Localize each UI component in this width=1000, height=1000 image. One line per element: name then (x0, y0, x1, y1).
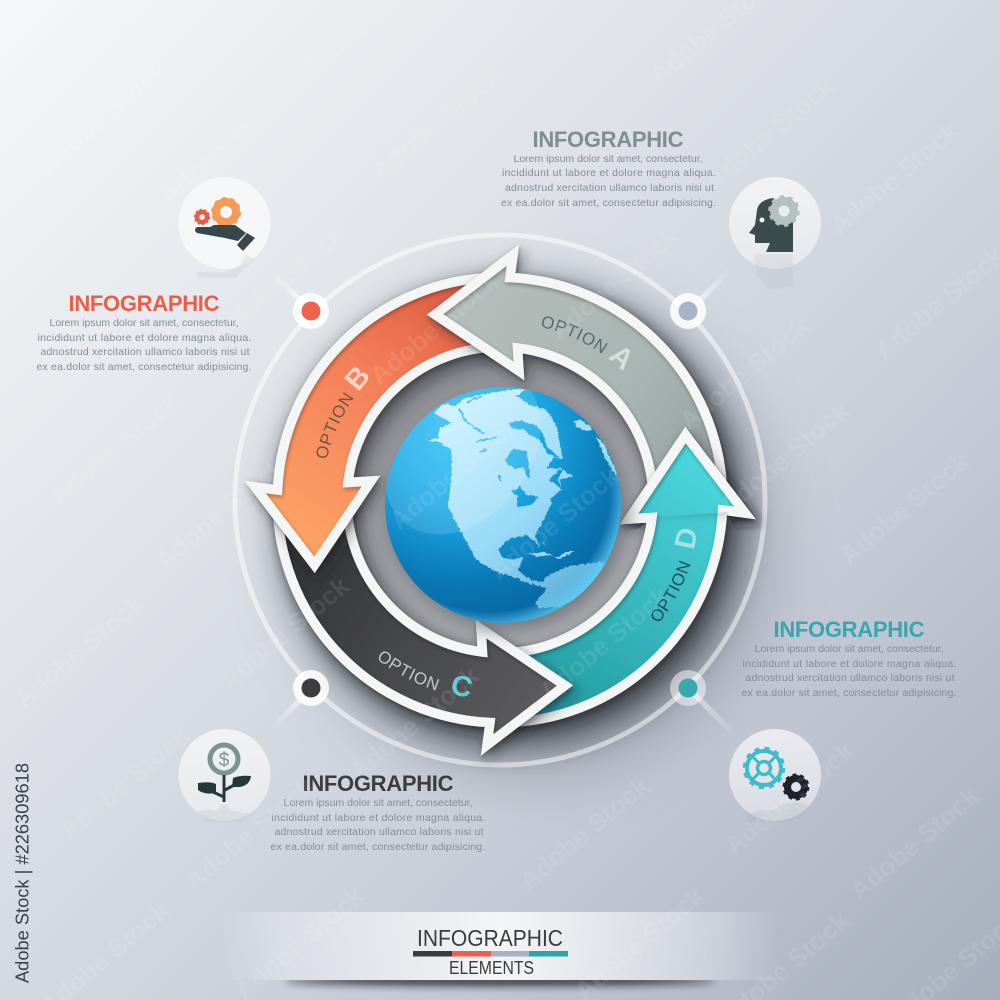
watermark: Adobe Stock (366, 60, 507, 186)
globe highlight (386, 387, 540, 534)
text block A: INFOGRAPHIC (532, 127, 684, 152)
watermark: Adobe Stock (699, 70, 840, 196)
text block D: ex ea.dolor sit amet, consectetur adipisicing. (742, 687, 956, 699)
connector spoke: C (272, 689, 311, 728)
banner shadow (285, 976, 715, 986)
text block C: ex ea.dolor sit amet, consectetur adipisicing. (270, 841, 486, 853)
icon circle: head with gear (729, 177, 821, 290)
watermark: Adobe Stock (534, 580, 675, 706)
diagram shadow (280, 283, 775, 780)
icon reflection (198, 804, 250, 822)
arrow C: OPTION (378, 652, 440, 690)
icon circle: money plant (178, 729, 270, 822)
connector spoke: A (689, 269, 731, 311)
outer thin ring (235, 235, 765, 765)
icon: hand with gears (195, 198, 255, 251)
arrow B: OPTION (316, 392, 354, 458)
watermark: Adobe Stock (149, 450, 290, 576)
node: option B (293, 293, 329, 329)
arrow D head overlapping arrow A tail (620, 427, 764, 532)
icon reflection (745, 802, 808, 822)
text block B: INFOGRAPHIC (68, 291, 220, 316)
text block A: ex ea.dolor sit amet, consectetur adipisicing. (501, 197, 716, 209)
banner title: INFOGRAPHIC (417, 925, 563, 951)
side stock label: Adobe Stock | #226309618 (12, 763, 32, 983)
icon circle: hand with gears (178, 177, 270, 278)
watermark: Adobe Stock (32, 55, 173, 181)
watermark: Adobe Stock (719, 735, 860, 861)
text block B (36, 291, 252, 373)
node: option C (293, 670, 329, 706)
icon reflection (197, 254, 255, 278)
text block C (270, 771, 486, 853)
connector spoke: B (272, 272, 311, 311)
arrow D (512, 477, 764, 739)
icon: gears (744, 748, 808, 799)
banner colour bar (413, 951, 568, 956)
text block B: adnostrud xercitation ullamco laboris nisi ut (40, 346, 250, 358)
globe rim light (435, 438, 621, 623)
text block A (501, 127, 716, 209)
watermark: Adobe Stock (214, 570, 355, 696)
watermark: Adobe Stock (9, 588, 150, 714)
arrow A: OPTION (542, 316, 608, 354)
text block C: INFOGRAPHIC (302, 771, 454, 796)
arrow D: D (669, 525, 705, 552)
text block D (742, 617, 956, 699)
arrow A: A (603, 339, 640, 377)
arrow B (244, 270, 496, 574)
watermark: Adobe Stock (834, 445, 975, 571)
icon: head with gear (749, 196, 798, 252)
watermark: Adobe Stock (714, 395, 855, 521)
watermark: Adobe Stock (364, 265, 505, 391)
icon reflection (755, 254, 793, 290)
watermark: Adobe Stock (824, 115, 965, 241)
inner disc (348, 348, 652, 652)
icon: money plant: $ (219, 750, 230, 771)
arrow D: OPTION (652, 560, 690, 622)
watermark: Adobe Stock (179, 770, 320, 896)
banner subtitle: ELEMENTS (449, 958, 534, 978)
globe (385, 387, 621, 623)
watermark: Adobe Stock (344, 660, 485, 786)
text block B: incididunt ut labore et dolore magna aliqua. (38, 332, 252, 344)
watermark: Adobe Stock (54, 720, 195, 846)
text block C: adnostrud xercitation ullamco laboris nisi ut (274, 826, 484, 838)
text block B: ex ea.dolor sit amet, consectetur adipisicing. (36, 361, 252, 373)
arrow A (426, 244, 738, 520)
bottom banner (220, 912, 780, 980)
watermark: Adobe Stock (544, 220, 685, 346)
text block A: adnostrud xercitation ullamco laboris nisi ut (505, 182, 714, 194)
text block B: Lorem ipsum dolor sit amet, consectetur, (50, 317, 238, 329)
text block C: incididunt ut labore et dolore magna aliqua. (272, 812, 486, 824)
watermark: Adobe Stock (209, 220, 350, 346)
watermark: Adobe Stock (514, 770, 655, 896)
continents (427, 389, 618, 608)
watermark: Adobe Stock (844, 780, 985, 906)
text block A: Lorem ipsum dolor sit amet, consectetur, (514, 153, 702, 165)
text block C: Lorem ipsum dolor sit amet, consectetur, (284, 797, 472, 809)
text block D: incididunt ut labore et dolore magna aliqua. (742, 658, 956, 670)
watermark: Adobe Stock (484, 460, 625, 586)
text block D: adnostrud xercitation ullamco laboris nisi ut (746, 672, 955, 684)
arrow C: C (448, 669, 475, 705)
text block A: incididunt ut labore et dolore magna aliqua. (502, 167, 716, 179)
watermark: Adobe Stock (384, 410, 525, 536)
arrow C (269, 510, 581, 765)
icon circle: gears (729, 729, 821, 822)
text block D: Lorem ipsum dolor sit amet, consectetur, (754, 643, 944, 655)
arrow B: B (339, 360, 377, 397)
globe shadow (388, 391, 628, 631)
watermark: Adobe Stock (154, 85, 295, 211)
connector spoke: D (689, 689, 733, 733)
node: option A (670, 293, 706, 329)
text block D: INFOGRAPHIC (774, 617, 925, 642)
watermark: Adobe Stock (674, 310, 815, 436)
watermark: Adobe Stock (44, 385, 185, 511)
node: option D (670, 670, 706, 706)
